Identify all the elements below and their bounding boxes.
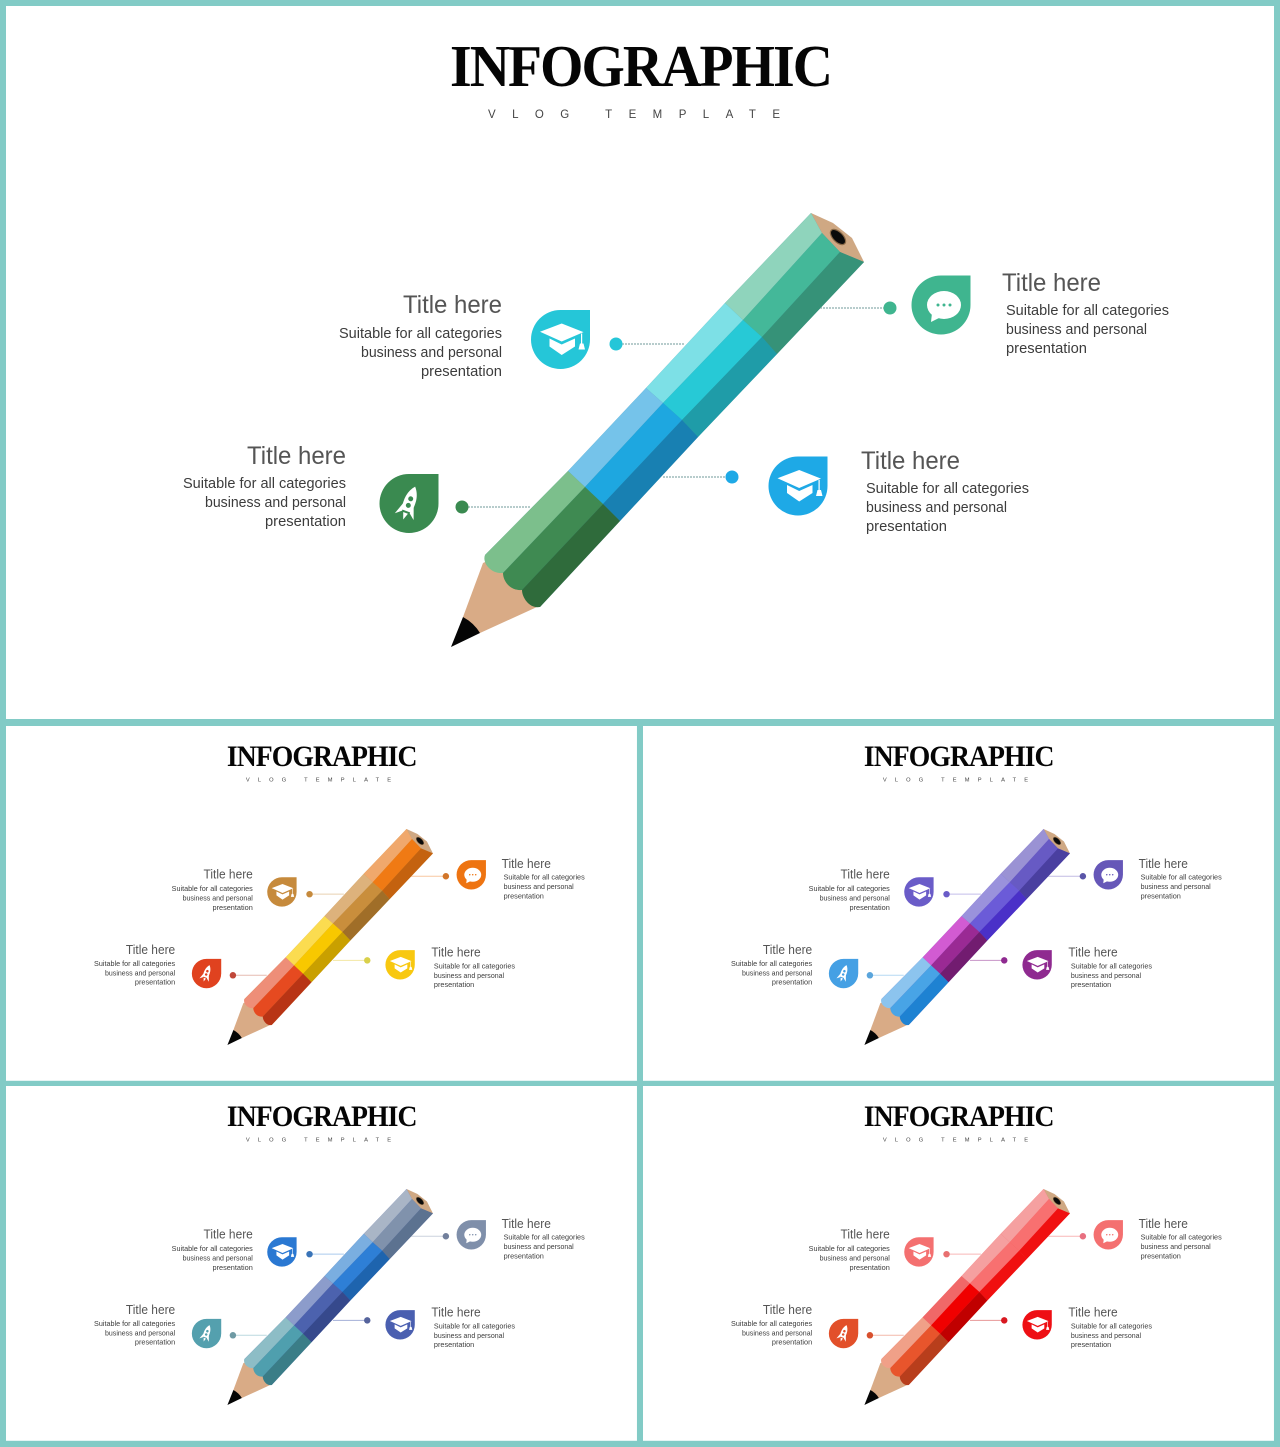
text block: lower right — [1068, 1305, 1152, 1349]
subtitle: VLOG TEMPLATE — [246, 778, 391, 784]
text block: lower right: business and personal — [434, 1331, 504, 1340]
text block: lower left: business and personal — [742, 968, 812, 977]
text block: upper left: Title here — [841, 1228, 890, 1242]
pencil segment 3 — [923, 916, 987, 982]
text block: upper right: presentation — [504, 1252, 544, 1261]
text block: upper right: Suitable for all categories — [504, 873, 585, 882]
text block: lower right: presentation — [1071, 1340, 1111, 1349]
panel: blue pencil slide — [6, 1086, 637, 1441]
text block: upper right: Title here — [1002, 269, 1101, 297]
text block: lower right: presentation — [1071, 980, 1111, 989]
text block: lower right: Suitable for all categories — [434, 1321, 515, 1330]
text block: lower right: Title here — [1068, 1305, 1118, 1319]
connector: cap — [943, 1251, 981, 1257]
icon: graduation cap yellow — [385, 950, 415, 980]
subtitle: VLOG TEMPLATE — [883, 1138, 1028, 1144]
icon: rocket — [192, 959, 221, 988]
pencil — [451, 213, 864, 647]
text block: upper right: business and personal — [504, 882, 574, 891]
text block: lower right: Title here — [1068, 945, 1118, 959]
text block: upper left — [172, 1228, 253, 1272]
text block: upper right: Title here — [502, 857, 551, 871]
pencil segment 2 — [961, 874, 1027, 940]
pencil segment 1 — [1001, 829, 1070, 899]
text block: lower right: business and personal — [1071, 1331, 1141, 1340]
text block: lower left: Title here — [763, 1303, 812, 1317]
pencil segment 1 — [364, 829, 433, 899]
icon: speech bubble — [1094, 860, 1123, 889]
text block: upper left: presentation — [212, 903, 253, 912]
text block: upper left: Suitable for all categories — [339, 325, 502, 342]
text block: lower right: Title here — [861, 447, 960, 475]
text block: upper right: Suitable for all categories — [1006, 302, 1169, 319]
text block: lower right: presentation — [434, 1340, 474, 1349]
text block: lower right: Suitable for all categories — [1071, 1321, 1152, 1330]
text block: lower right: business and personal — [1071, 971, 1141, 980]
connector: cap red — [970, 1317, 1007, 1324]
text block: lower left: Title here — [763, 943, 812, 957]
connector: chat — [1048, 873, 1086, 880]
connector: rocket — [867, 972, 904, 979]
text block: lower left: Title here — [126, 943, 175, 957]
pencil — [227, 829, 433, 1045]
text block: upper right — [502, 857, 585, 901]
pencil segment 2 — [961, 1234, 1027, 1300]
pencil segment 3 — [286, 916, 350, 982]
text block: lower left: Suitable for all categories — [731, 1319, 812, 1328]
text block: upper right: business and personal — [504, 1242, 574, 1251]
icon: rocket — [829, 959, 858, 988]
text block: upper right: Title here — [502, 1217, 551, 1231]
connector: cap — [306, 891, 344, 897]
text block: lower left: Title here — [247, 442, 346, 470]
text block: upper right — [1139, 857, 1222, 901]
connector: chat — [411, 873, 449, 880]
subtitle: VLOG TEMPLATE — [488, 109, 780, 121]
text block: upper left: Suitable for all categories — [172, 884, 253, 893]
pencil — [864, 1189, 1070, 1405]
panel: main teal pencil slide — [6, 6, 1274, 719]
text block: upper left: Suitable for all categories — [809, 884, 890, 893]
pencil segment 4 — [244, 1317, 312, 1385]
text block: upper left: presentation — [212, 1263, 253, 1272]
text block: upper right — [1002, 269, 1169, 357]
icon: rocket — [380, 474, 438, 533]
pencil segment 2 — [646, 303, 777, 437]
icon: rocket — [192, 1319, 221, 1348]
text block: lower right: business and personal — [866, 499, 1007, 516]
pencil segment 1 — [364, 1189, 433, 1259]
connector: rocket — [867, 1332, 904, 1339]
text block: upper left: business and personal — [183, 894, 253, 903]
pencil segment 4 — [881, 957, 949, 1025]
text block: lower right — [1068, 945, 1152, 989]
text block: upper left — [172, 868, 253, 912]
text block: lower right: presentation — [434, 980, 474, 989]
connector: cap — [943, 891, 981, 897]
text block: upper left: business and personal — [820, 1254, 890, 1263]
text block: lower left: Suitable for all categories — [94, 1319, 175, 1328]
icon: graduation cap teal — [531, 310, 590, 369]
text block: lower right — [861, 447, 1029, 535]
title: INFOGRAPHIC — [864, 741, 1054, 773]
text block: upper right: presentation — [1141, 1252, 1181, 1261]
text block: upper left: Title here — [204, 868, 253, 882]
text block: upper right: Title here — [1139, 857, 1188, 871]
text block: upper right: Suitable for all categories — [504, 1233, 585, 1242]
pencil — [227, 1189, 433, 1405]
text block: lower left: Title here — [126, 1303, 175, 1317]
connector: chat — [411, 1233, 449, 1240]
pencil segment 2 — [324, 874, 390, 940]
icon: graduation cap blue — [768, 456, 828, 516]
subtitle: VLOG TEMPLATE — [246, 1138, 391, 1144]
connector: cap blue — [663, 470, 738, 484]
text block: upper left: Suitable for all categories — [172, 1244, 253, 1253]
text block: lower right: Title here — [431, 1305, 481, 1319]
title: INFOGRAPHIC — [227, 741, 417, 773]
text block: upper right: business and personal — [1006, 321, 1147, 338]
pencil — [864, 829, 1070, 1045]
text block: upper right — [1139, 1217, 1222, 1261]
text block: upper right: presentation — [1006, 340, 1087, 357]
text block: lower right — [431, 945, 515, 989]
title: INFOGRAPHIC — [450, 33, 831, 99]
text block: lower left — [731, 1303, 812, 1347]
connector: rocket — [456, 500, 530, 514]
icon: speech bubble — [1094, 1220, 1123, 1249]
text block: upper left: Title here — [204, 1228, 253, 1242]
text block: upper left: Title here — [841, 868, 890, 882]
text block: upper left — [809, 868, 890, 912]
text block: lower left: Suitable for all categories — [94, 959, 175, 968]
connector: cap — [306, 1251, 344, 1257]
text block: lower right: Suitable for all categories — [866, 480, 1029, 497]
text block: upper left — [339, 291, 502, 380]
icon: speech bubble — [457, 1220, 486, 1249]
pencil segment 4 — [881, 1317, 949, 1385]
text block: lower left — [94, 943, 175, 987]
icon: graduation cap blue — [267, 1237, 297, 1267]
text block: upper right: business and personal — [1141, 882, 1211, 891]
text block: lower right: Suitable for all categories — [434, 961, 515, 970]
connector: cap indigo — [333, 1317, 370, 1324]
connector: cap yellow — [333, 957, 370, 964]
text block: lower left: Suitable for all categories — [183, 475, 346, 492]
connector: chat — [1048, 1233, 1086, 1240]
icon: graduation cap red — [1022, 1310, 1052, 1340]
connector: rocket — [230, 1332, 267, 1339]
pencil segment 3 — [568, 388, 698, 521]
pencil segment 4 — [244, 957, 312, 1025]
icon: graduation cap violet — [904, 877, 934, 907]
text block: lower left: presentation — [772, 978, 812, 987]
icon: graduation cap indigo — [385, 1310, 415, 1340]
text block: lower left: presentation — [265, 513, 346, 530]
pencil segment 2 — [324, 1234, 390, 1300]
panel: orange pencil slide — [6, 726, 637, 1081]
text block: upper left: Suitable for all categories — [809, 1244, 890, 1253]
text block: upper left: presentation — [849, 903, 890, 912]
text block: lower left — [183, 442, 346, 530]
text block: lower left: presentation — [135, 1338, 175, 1347]
connector: rocket — [230, 972, 267, 979]
text block: upper left: business and personal — [361, 344, 502, 361]
text block: lower left: business and personal — [742, 1328, 812, 1337]
title: INFOGRAPHIC — [227, 1101, 417, 1133]
text block: lower left: presentation — [772, 1338, 812, 1347]
pencil segment 1 — [725, 213, 864, 354]
text block: upper right: Suitable for all categories — [1141, 873, 1222, 882]
connector: cap magenta — [970, 957, 1007, 964]
subtitle: VLOG TEMPLATE — [883, 778, 1028, 784]
text block: lower right: Suitable for all categories — [1071, 961, 1152, 970]
text block: lower left: business and personal — [105, 1328, 175, 1337]
text block: upper left: presentation — [421, 363, 502, 380]
panel: purple pencil slide — [643, 726, 1274, 1081]
connector: chat — [820, 302, 896, 314]
text block: upper left: business and personal — [820, 894, 890, 903]
pencil segment 4 — [484, 471, 620, 607]
text block: lower left: Suitable for all categories — [731, 959, 812, 968]
icon: speech bubble — [912, 276, 970, 334]
panel: red pencil slide — [643, 1086, 1274, 1441]
icon: graduation cap magenta — [1022, 950, 1052, 980]
pencil segment 1 — [1001, 1189, 1070, 1259]
text block: upper right: presentation — [1141, 892, 1181, 901]
text block: upper right: business and personal — [1141, 1242, 1211, 1251]
text block: upper left: presentation — [849, 1263, 890, 1272]
text block: upper left — [809, 1228, 890, 1272]
text block: lower left — [94, 1303, 175, 1347]
text block: upper left: Title here — [403, 291, 502, 319]
icon: speech bubble — [457, 860, 486, 889]
pencil segment 3 — [923, 1276, 987, 1342]
text block: lower right — [431, 1305, 515, 1349]
text block: upper left: business and personal — [183, 1254, 253, 1263]
text block: lower left — [731, 943, 812, 987]
connector: cap teal — [610, 338, 685, 350]
text block: lower right: presentation — [866, 518, 947, 535]
text block: lower left: business and personal — [105, 968, 175, 977]
text block: lower right: business and personal — [434, 971, 504, 980]
icon: graduation cap brown — [267, 877, 297, 907]
text block: lower left: presentation — [135, 978, 175, 987]
icon: rocket — [829, 1319, 858, 1348]
text block: upper right: Title here — [1139, 1217, 1188, 1231]
pencil segment 3 — [286, 1276, 350, 1342]
icon: graduation cap pink — [904, 1237, 934, 1267]
text block: upper right — [502, 1217, 585, 1261]
text block: lower right: Title here — [431, 945, 481, 959]
text block: upper right: presentation — [504, 892, 544, 901]
text block: lower left: business and personal — [205, 494, 346, 511]
title: INFOGRAPHIC — [864, 1101, 1054, 1133]
text block: upper right: Suitable for all categories — [1141, 1233, 1222, 1242]
